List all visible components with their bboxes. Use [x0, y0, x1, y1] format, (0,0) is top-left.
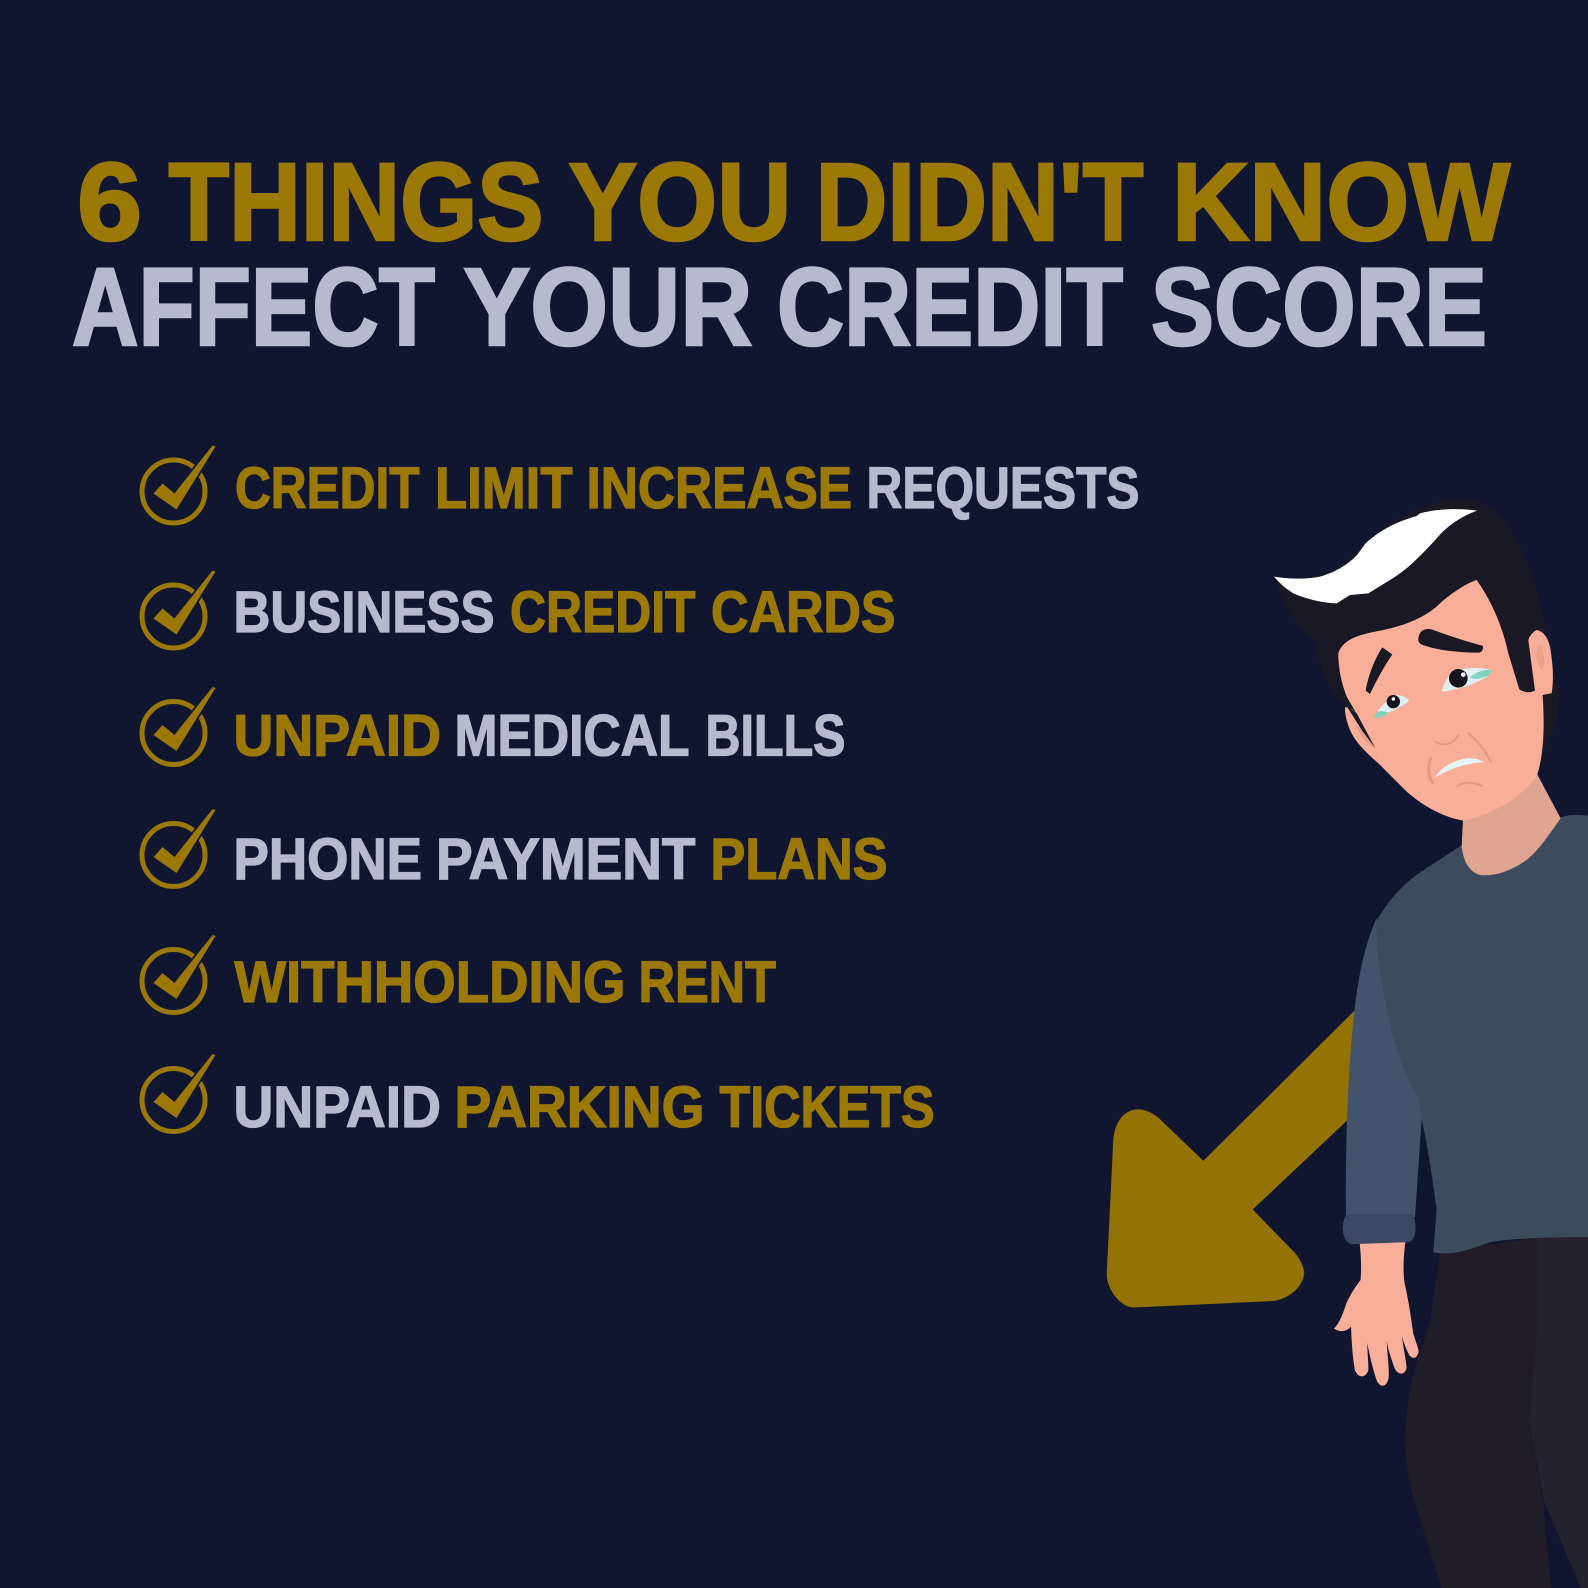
item 1: credit limit increase requests: INCREASE	[586, 456, 852, 521]
title line 1: THINGS	[168, 141, 544, 264]
man's hand	[1334, 1240, 1419, 1386]
title line 2	[72, 246, 1487, 369]
item 6: unpaid parking tickets: UNPAID	[234, 1075, 441, 1140]
mouth	[1435, 758, 1484, 777]
item 3: unpaid medical bills: MEDICAL	[454, 704, 690, 768]
man's trousers	[1405, 1237, 1588, 1588]
sideburn	[1346, 705, 1375, 748]
item 4: phone payment plans: PAYMENT	[436, 827, 696, 892]
title line 2: CREDIT	[777, 246, 1123, 369]
title line 1: 6	[77, 141, 142, 264]
title	[72, 141, 1510, 369]
item 2: business credit cards	[142, 570, 896, 648]
item 4: phone payment plans: PHONE	[234, 827, 422, 892]
white hair highlight	[1274, 509, 1477, 603]
checklist	[142, 446, 1140, 1140]
title line 2: SCORE	[1151, 246, 1487, 369]
right ear shadow	[1536, 643, 1544, 670]
title line 1: YOU	[568, 141, 792, 264]
arrow pointing down	[1107, 1009, 1357, 1308]
man's sweater	[1343, 815, 1588, 1253]
item 1: credit limit increase requests: CREDIT	[235, 456, 420, 521]
title line 1	[77, 141, 1510, 264]
item 2: business credit cards: CREDIT	[510, 580, 696, 645]
right eye	[1442, 668, 1492, 692]
cuff	[1343, 1215, 1415, 1244]
item 3: unpaid medical bills: UNPAID	[234, 704, 441, 768]
item 5: withholding rent	[142, 935, 776, 1015]
item 3: unpaid medical bills: BILLS	[706, 704, 846, 768]
title line 2: YOUR	[464, 246, 752, 369]
item 2: business credit cards: CARDS	[711, 580, 896, 645]
title line 2: AFFECT	[72, 246, 435, 369]
item 6: unpaid parking tickets: TICKETS	[720, 1075, 934, 1140]
item 2: business credit cards: BUSINESS	[234, 580, 494, 645]
left ear	[1345, 707, 1378, 763]
man's head	[1274, 500, 1561, 875]
face	[1338, 580, 1553, 821]
sad man illustration	[1274, 500, 1588, 1588]
item 5: withholding rent: WITHHOLDING	[234, 950, 626, 1015]
item 5: withholding rent: RENT	[638, 950, 776, 1015]
title line 1: KNOW	[1172, 141, 1510, 264]
item 6: unpaid parking tickets: PARKING	[454, 1075, 704, 1140]
item 1: credit limit increase requests	[142, 446, 1140, 523]
neck	[1462, 773, 1561, 875]
left eyebrow	[1366, 647, 1392, 694]
item 3: unpaid medical bills	[142, 687, 846, 768]
right eyebrow	[1418, 629, 1483, 653]
nose and creases	[1429, 733, 1491, 786]
sleeve	[1346, 918, 1422, 1217]
left eye	[1374, 695, 1409, 718]
item 4: phone payment plans: PLANS	[710, 827, 888, 892]
item 1: credit limit increase requests: LIMIT	[435, 456, 572, 521]
item 6: unpaid parking tickets	[142, 1054, 934, 1140]
item 4: phone payment plans	[142, 809, 888, 892]
hair	[1275, 500, 1559, 750]
title line 1: DIDN'T	[816, 141, 1144, 264]
item 1: credit limit increase requests: REQUESTS	[866, 456, 1140, 521]
